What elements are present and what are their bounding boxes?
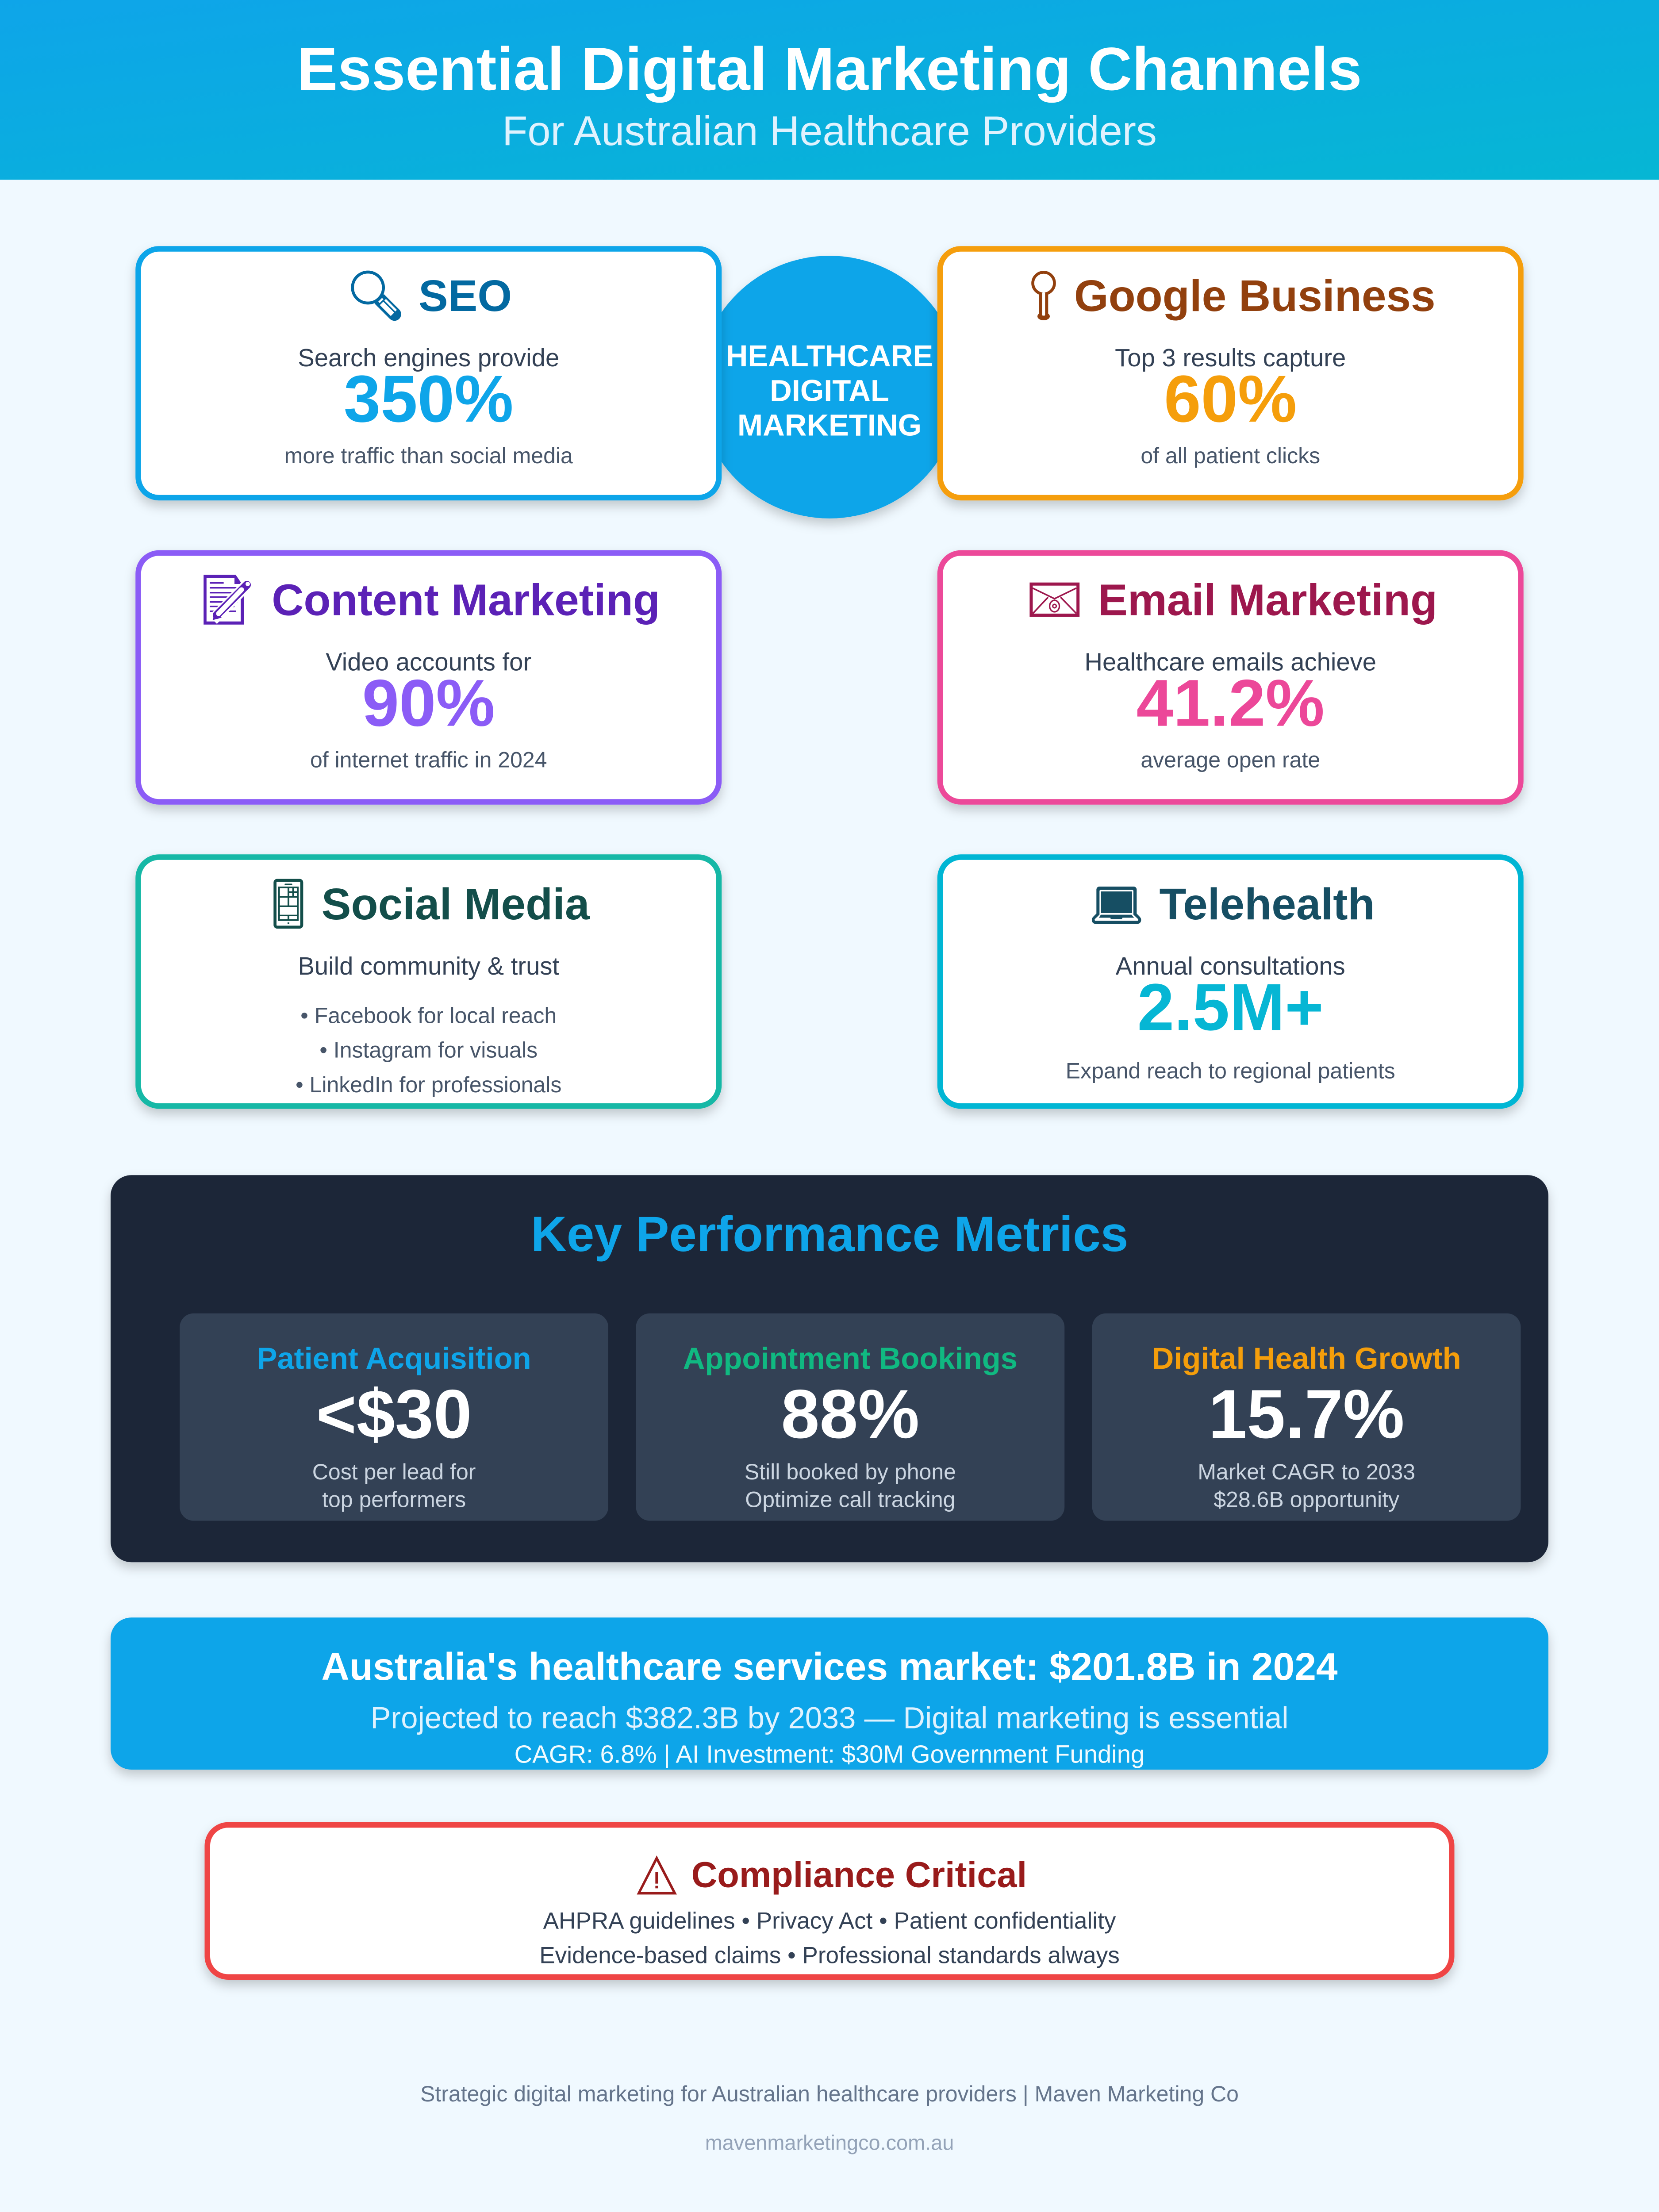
- panel: compliance: [207, 1825, 1452, 1977]
- text: Content intro: Video accounts for: [326, 648, 531, 676]
- metric: appointment bookings: Still booked by phone: [745, 1459, 956, 1484]
- panel: Telehealth: [940, 857, 1521, 1106]
- heading: Telehealth: Telehealth: [1159, 879, 1375, 929]
- text: Telehealth note: Expand reach to regional patients: [1066, 1058, 1395, 1083]
- icon: memo: [204, 575, 250, 625]
- central hub circle: HEALTHCARE: [726, 339, 933, 373]
- metric: appointment bookings: 88%: [781, 1376, 919, 1453]
- panel: Content Marketing: [138, 553, 719, 802]
- stat: 60%: 60%: [1164, 361, 1297, 436]
- list: social networks: • Instagram for visuals: [319, 1038, 538, 1063]
- banner note: CAGR: 6.8% | AI Investment: $30M Government Funding: [515, 1740, 1144, 1768]
- list: social networks: • LinkedIn for professionals: [296, 1072, 561, 1097]
- icon: envelope: [1031, 584, 1078, 615]
- heading: SEO: SEO: [419, 271, 512, 321]
- list: social networks: • Facebook for local reach: [300, 1003, 557, 1028]
- heading: Content Marketing: Content Marketing: [272, 576, 660, 625]
- footer: [420, 2081, 1239, 2154]
- text: SEO intro: Search engines provide: [298, 344, 559, 372]
- icon: warning: [637, 1855, 677, 1894]
- metric: appointment bookings: [636, 1313, 1064, 1521]
- text: Google intro: Top 3 results capture: [1115, 344, 1346, 372]
- subtitle: For Australian Healthcare Providers: [502, 108, 1157, 154]
- title: Essential Digital Marketing Channels: [297, 35, 1362, 103]
- metric: digital health growth: Digital Health Growth: [1152, 1341, 1461, 1375]
- footer: Strategic digital marketing for Australian healthcare providers | Maven Marketing Co: [420, 2081, 1239, 2106]
- heading: compliance: Compliance Critical: [691, 1855, 1027, 1895]
- icon: magnifier: [353, 272, 404, 323]
- metric: patient acquisition: <$30: [316, 1376, 472, 1453]
- text: SEO note: more traffic than social media: [284, 443, 573, 468]
- heading: Google Business: Google Business: [1074, 271, 1436, 321]
- header: [0, 0, 1659, 180]
- metric: patient acquisition: [180, 1313, 608, 1521]
- metric: patient acquisition: Patient Acquisition: [257, 1341, 531, 1375]
- metric: digital health growth: $28.6B opportunity: [1214, 1487, 1399, 1512]
- central hub circle: DIGITAL: [770, 373, 889, 407]
- central hub circle: [698, 256, 961, 518]
- panel: SEO: [138, 249, 719, 498]
- text: Google note: of all patient clicks: [1141, 443, 1320, 468]
- banner heading: Australia's healthcare services market: $201.8B in 2024: [321, 1645, 1338, 1688]
- text: Telehealth intro: Annual consultations: [1116, 952, 1345, 980]
- icon: pin: [1033, 273, 1055, 320]
- stat: 41.2%: 41.2%: [1137, 666, 1325, 740]
- panel: Google Business: [940, 249, 1521, 498]
- metric: patient acquisition: Cost per lead for: [312, 1459, 476, 1484]
- banner subheading: Projected to reach $382.3B by 2033 — Digital marketing is essential: [370, 1701, 1289, 1735]
- metric: digital health growth: 15.7%: [1209, 1376, 1405, 1453]
- panel: Email Marketing: [940, 553, 1521, 802]
- metric: appointment bookings: Appointment Bookings: [683, 1341, 1018, 1375]
- metric: patient acquisition: top performers: [322, 1487, 466, 1512]
- footer: mavenmarketingco.com.au: [705, 2131, 954, 2154]
- text: compliance line 1: AHPRA guidelines • Privacy Act • Patient confidentiality: [543, 1908, 1116, 1934]
- metric: digital health growth: [1092, 1313, 1521, 1521]
- stat: 350%: 350%: [344, 361, 514, 436]
- icon: laptop: [1092, 887, 1141, 924]
- heading: metrics: Key Performance Metrics: [531, 1206, 1128, 1262]
- heading: Email Marketing: Email Marketing: [1098, 576, 1437, 625]
- icon: phone: [275, 880, 302, 927]
- heading: Social Media: Social Media: [322, 879, 590, 929]
- list: social networks: [296, 1003, 561, 1097]
- central hub circle: MARKETING: [737, 408, 922, 442]
- text: Email note: average open rate: [1141, 747, 1320, 772]
- stat: 2.5M+: 2.5M+: [1137, 970, 1324, 1044]
- panel: Social Media: [138, 857, 719, 1106]
- banner: market size: [111, 1617, 1548, 1770]
- text: Email intro: Healthcare emails achieve: [1084, 648, 1376, 676]
- metric: appointment bookings: Optimize call tracking: [745, 1487, 955, 1512]
- text: Content note: of internet traffic in 2024: [310, 747, 547, 772]
- panel: key performance metrics: [111, 1175, 1548, 1562]
- text: compliance line 2: Evidence-based claims • Professional standards always: [539, 1942, 1120, 1968]
- text: Social intro: Build community & trust: [298, 952, 560, 980]
- stat: 90%: 90%: [362, 666, 495, 740]
- metric: digital health growth: Market CAGR to 2033: [1198, 1459, 1415, 1484]
